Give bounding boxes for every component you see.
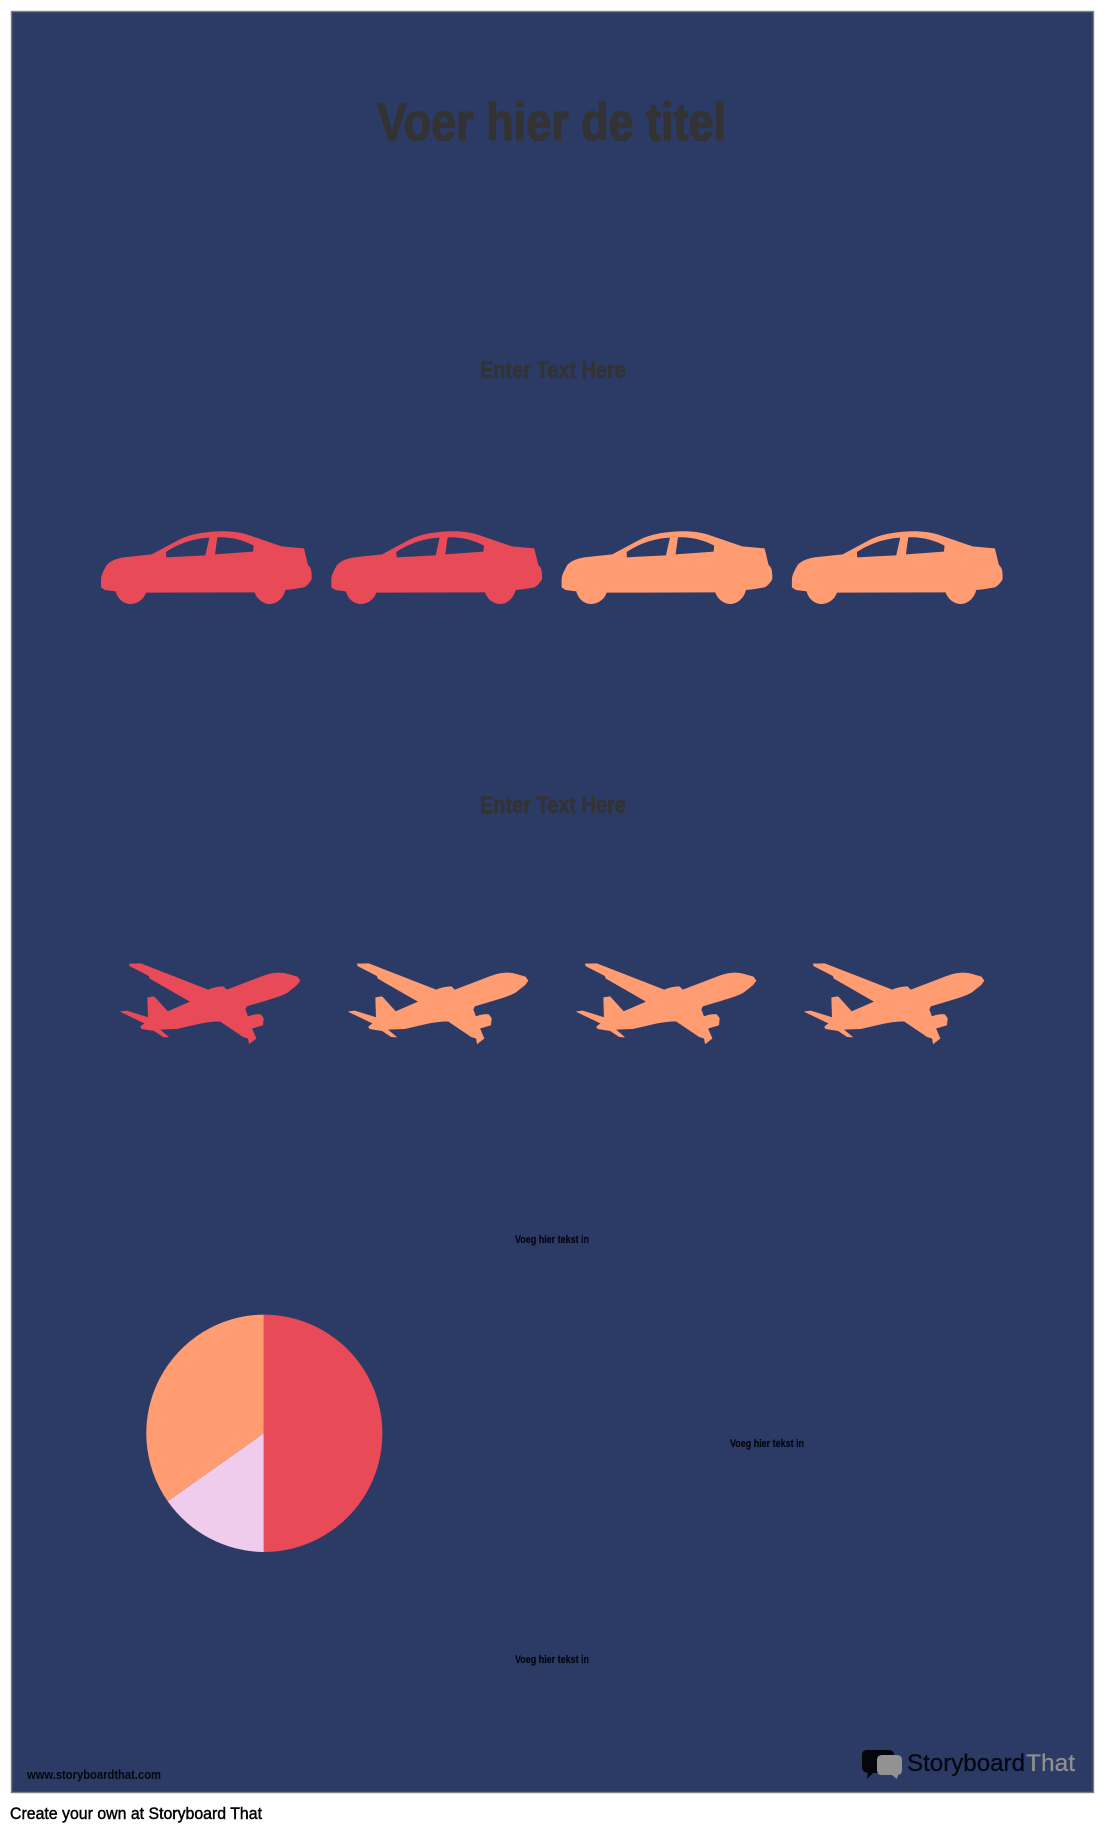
icon: plane 2 orange bbox=[349, 964, 528, 1044]
logo wordmark dark: Storyboard bbox=[907, 1750, 1025, 1777]
icon row: cars bbox=[101, 531, 1003, 604]
icon row: planes bbox=[121, 964, 984, 1044]
icon: car 1 red bbox=[101, 531, 312, 604]
icon: plane 3 orange bbox=[577, 964, 756, 1044]
heading: planes section: Enter Text Here bbox=[480, 792, 626, 819]
pie slice: orange bbox=[146, 1315, 264, 1501]
icon: car 3 orange bbox=[562, 531, 772, 604]
icon: plane 1 red bbox=[121, 964, 300, 1044]
icon: grey speech bubble bbox=[877, 1755, 902, 1779]
footer url: www.storyboardthat.com bbox=[26, 1767, 161, 1782]
pie chart bbox=[146, 1315, 382, 1552]
pie slice: red half bbox=[264, 1315, 382, 1552]
heading: cars section: Enter Text Here bbox=[480, 357, 626, 384]
title: Voer hier de titel bbox=[377, 93, 726, 152]
pie slice: pink bbox=[168, 1433, 264, 1552]
icon: car 2 red bbox=[331, 531, 542, 604]
logo wordmark grey: That bbox=[1026, 1750, 1075, 1777]
text: right caption: Voeg hier tekst in bbox=[730, 1438, 804, 1450]
icon: plane 4 orange bbox=[805, 964, 984, 1044]
icon: car 4 orange bbox=[792, 531, 1003, 604]
text: bottom caption: Voeg hier tekst in bbox=[515, 1654, 589, 1666]
logo: Storyboard That bbox=[862, 1750, 1075, 1779]
footer link text: Create your own at Storyboard That bbox=[10, 1804, 262, 1823]
text: top caption: Voeg hier tekst in bbox=[515, 1234, 589, 1246]
icon: black speech bubble bbox=[862, 1750, 894, 1779]
